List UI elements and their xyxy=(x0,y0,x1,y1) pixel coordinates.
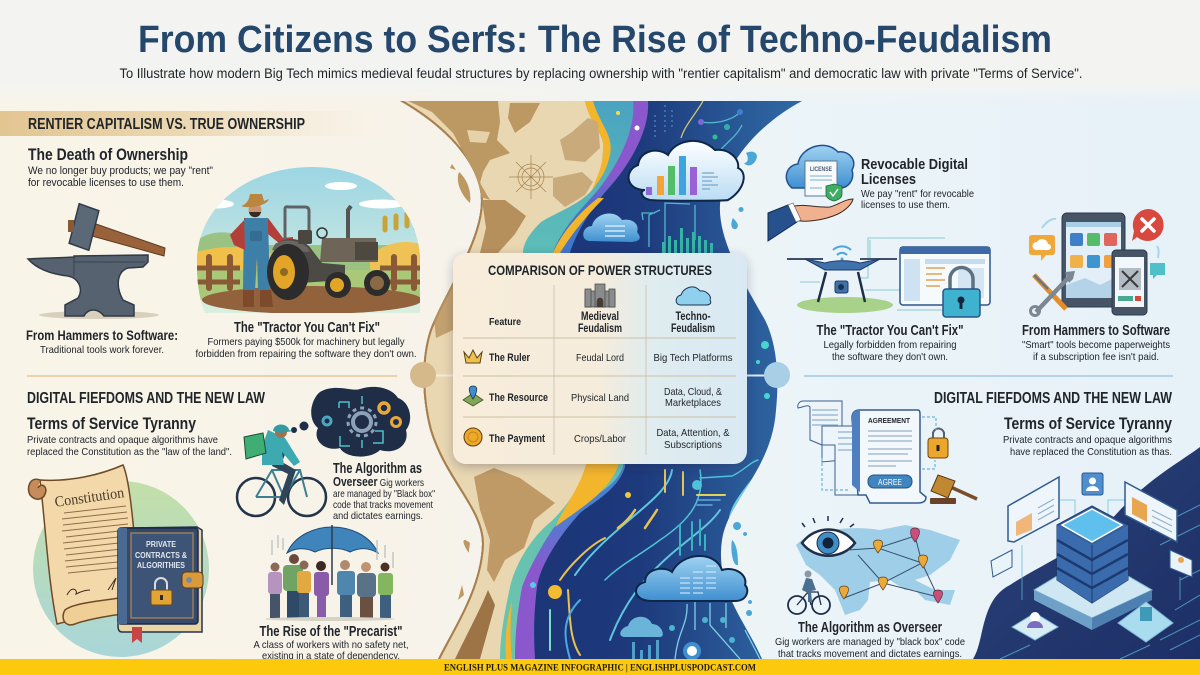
illustration: drone and locked software xyxy=(787,238,990,317)
text: the rise of the precarist: The Rise of the "Precarist" xyxy=(260,624,402,640)
text: the algorithm as overseer: Overseer Gig workers xyxy=(333,474,424,489)
illustration: constitution scroll and locked book: CONTRACTS & xyxy=(135,551,187,560)
blue droplets right of hourglass xyxy=(731,152,757,616)
text: revocable digital licenses xyxy=(861,157,974,211)
text: the algorithm as overseer, right xyxy=(775,620,965,660)
row: the payment: Subscriptions xyxy=(664,439,722,451)
illustration: constitution scroll and locked book xyxy=(28,465,209,657)
text: the algorithm as overseer: are managed by "Black box" xyxy=(333,488,435,500)
map: Europe and Africa xyxy=(560,118,600,162)
row: the ruler: The Ruler xyxy=(489,352,531,364)
row: the resource: Marketplaces xyxy=(665,397,721,409)
text: revocable digital licenses: Revocable Digital xyxy=(861,157,968,173)
left block: terms of service tyranny: Terms of Service Tyranny xyxy=(27,414,196,433)
text: from hammers to software xyxy=(26,328,178,356)
icon: license cloud in hand xyxy=(768,145,854,241)
illustration: constitution scroll and locked book: ALGORITHIES xyxy=(137,561,186,570)
illustration: eye over world map with cyclist xyxy=(788,516,960,615)
row: the payment: Crops/Labor xyxy=(574,433,626,445)
row: the resource: Physical Land xyxy=(571,392,629,404)
small blue cloud xyxy=(583,213,640,242)
map: compass rose xyxy=(509,155,553,199)
text: the tractor you can't fix, right: The "Tractor You Can't Fix" xyxy=(816,323,964,339)
row: the resource xyxy=(463,386,722,409)
map stray islands xyxy=(450,164,471,600)
left block: terms of service tyranny xyxy=(27,414,232,458)
table grid xyxy=(554,285,646,455)
map: South America lower xyxy=(474,468,555,582)
text: from hammers to software: From Hammers to Software: xyxy=(26,328,178,343)
row: the payment: The Payment xyxy=(489,433,545,445)
text: from hammers to software, right: "Smart" tools become paperweights xyxy=(1022,339,1170,351)
text: the tractor you can't fix, right xyxy=(816,323,964,363)
book xyxy=(118,527,202,632)
illustration: tablet, phone and tools xyxy=(1029,209,1165,316)
right divider xyxy=(804,375,1173,377)
left block: the death of ownership: We no longer buy products; we pay "rent" xyxy=(28,165,213,177)
digital circuit lines top xyxy=(642,101,742,253)
text: the tractor you can't fix, right: Legally forbidden from repairing xyxy=(824,339,957,351)
row: the ruler xyxy=(464,350,732,364)
text: the algorithm as overseer, right: that tracks movement and dictates earnings. xyxy=(778,648,962,660)
illustration: server stack on navy network xyxy=(973,447,1200,659)
left block: terms of service tyranny: Private contracts and opaque algorithms have xyxy=(27,434,218,446)
connector line left xyxy=(432,374,456,376)
footer bar xyxy=(0,659,1200,675)
row: the payment xyxy=(464,427,730,451)
table column headers: Feature xyxy=(489,316,521,328)
left heading: digital fiefdoms: DIGITAL FIEFDOMS AND THE NEW LAW xyxy=(27,390,265,407)
illustration: agreement documents and gavel: AGREE xyxy=(878,478,902,487)
text: the rise of the precarist: A class of workers with no safety net, xyxy=(254,639,408,651)
subtitle: To Illustrate how modern Big Tech mimics medieval feudal structures by replacing ownership with "rentier capitalism" and democratic law with private "Terms of Service". xyxy=(120,66,1082,81)
connector node right xyxy=(764,362,790,388)
icon: cloud header xyxy=(676,287,711,305)
connector line right xyxy=(745,374,769,376)
text: the tractor you can't fix xyxy=(196,320,416,360)
table column headers xyxy=(489,311,715,335)
comparison table panel xyxy=(453,253,747,464)
row: the resource: Data, Cloud, & xyxy=(664,386,722,398)
digital stream lines lower xyxy=(550,460,760,659)
text: the tractor you can't fix: forbidden from repairing the software they don't own. xyxy=(196,348,416,360)
text: the algorithm as overseer xyxy=(333,461,435,522)
text: the rise of the precarist: existing in a state of dependency. xyxy=(262,650,400,662)
text: the tractor you can't fix: Formers paying $500k for machinery but legally xyxy=(208,336,405,348)
text: from hammers to software, right: if a subscription fee isn't paid. xyxy=(1033,351,1159,363)
row: the resource: The Resource xyxy=(489,392,548,404)
table column headers: Feudalism xyxy=(671,323,715,335)
lower small cloud xyxy=(620,617,663,637)
text: the algorithm as overseer, right: Gig workers are managed by "black box" code xyxy=(775,636,965,648)
lower large cloud xyxy=(636,556,747,601)
map: South America upper xyxy=(480,200,526,253)
row: the payment: Data, Attention, & xyxy=(656,427,730,439)
text: the rise of the precarist xyxy=(254,624,408,662)
title: From Citizens to Serfs: The Rise of Techno-Feudalism xyxy=(138,19,1052,61)
illustration: farmer and tractor xyxy=(195,165,423,315)
top header backdrop xyxy=(0,0,1200,104)
left block: terms of service tyranny: replaced the Constitution as the "law of the land". xyxy=(27,446,232,458)
connector node left xyxy=(410,362,436,388)
left block: the death of ownership: The Death of Ownership xyxy=(28,145,188,164)
farmer xyxy=(243,218,270,290)
table column headers: Feudalism xyxy=(578,323,622,335)
illustration: constitution scroll and locked book: PRIVATE xyxy=(146,540,177,549)
icon: hammer and anvil xyxy=(28,203,165,319)
text: revocable digital licenses: We pay "rent" for revocable xyxy=(861,188,974,200)
illustration: agreement documents and gavel: AGREEMENT xyxy=(868,418,911,425)
text: the algorithm as overseer: and dictates earnings. xyxy=(333,510,423,522)
left block: the death of ownership: for revocable licenses to use them. xyxy=(28,177,184,189)
text: revocable digital licenses: Licenses xyxy=(861,172,916,188)
row: the ruler: Big Tech Platforms xyxy=(654,352,732,364)
left divider xyxy=(27,375,397,377)
left block: the death of ownership xyxy=(28,145,213,189)
text: from hammers to software, right xyxy=(1022,323,1170,363)
footer bar: ENGLISH PLUS MAGAZINE INFOGRAPHIC | ENGLISHPLUSPODCAST.COM xyxy=(444,664,756,674)
left edge shading of map xyxy=(400,101,482,659)
right block: terms of service tyranny xyxy=(1003,414,1172,458)
left panel: rentier capitalism heading band xyxy=(0,111,400,136)
tractor xyxy=(267,206,390,300)
text: the algorithm as overseer, right: The Algorithm as Overseer xyxy=(798,620,942,636)
table title: COMPARISON OF POWER STRUCTURES xyxy=(488,262,712,278)
illustration: cyclist and algorithm cloud xyxy=(237,387,410,516)
row: the ruler: Feudal Lord xyxy=(576,352,624,364)
small circuit at bottom xyxy=(675,602,760,659)
text: the tractor you can't fix, right: the software they don't own. xyxy=(832,351,948,363)
icon: license cloud in hand: LICENSE xyxy=(810,167,832,173)
text: the algorithm as overseer: code that tracks movement xyxy=(333,499,433,511)
map: North America xyxy=(408,101,510,200)
icon: castle xyxy=(585,284,615,307)
right block: terms of service tyranny: have replaced the Constitution as thas. xyxy=(1010,446,1172,458)
illustration: agreement documents and gavel xyxy=(798,401,977,504)
map: patagonia and lower coast xyxy=(455,590,495,659)
left heading: RENTIER CAPITALISM VS. TRUE OWNERSHIP xyxy=(28,116,305,133)
right block: terms of service tyranny: Private contracts and opaque algorithms xyxy=(1003,434,1172,446)
illustration: workers under umbrella xyxy=(265,525,395,621)
table column headers: Techno- xyxy=(676,311,711,323)
cloud with bar chart xyxy=(629,141,744,201)
text: from hammers to software: Traditional tools work forever. xyxy=(40,344,164,356)
text: the tractor you can't fix: The "Tractor You Can't Fix" xyxy=(234,320,380,336)
text: the algorithm as overseer: The Algorithm as xyxy=(333,461,422,477)
table column headers: Medieval xyxy=(581,311,619,323)
central hourglass: parchment map merging into digital network xyxy=(400,101,802,659)
illustration: constitution scroll and locked book: Constitution xyxy=(54,485,126,511)
text: revocable digital licenses: licenses to use them. xyxy=(861,199,950,211)
